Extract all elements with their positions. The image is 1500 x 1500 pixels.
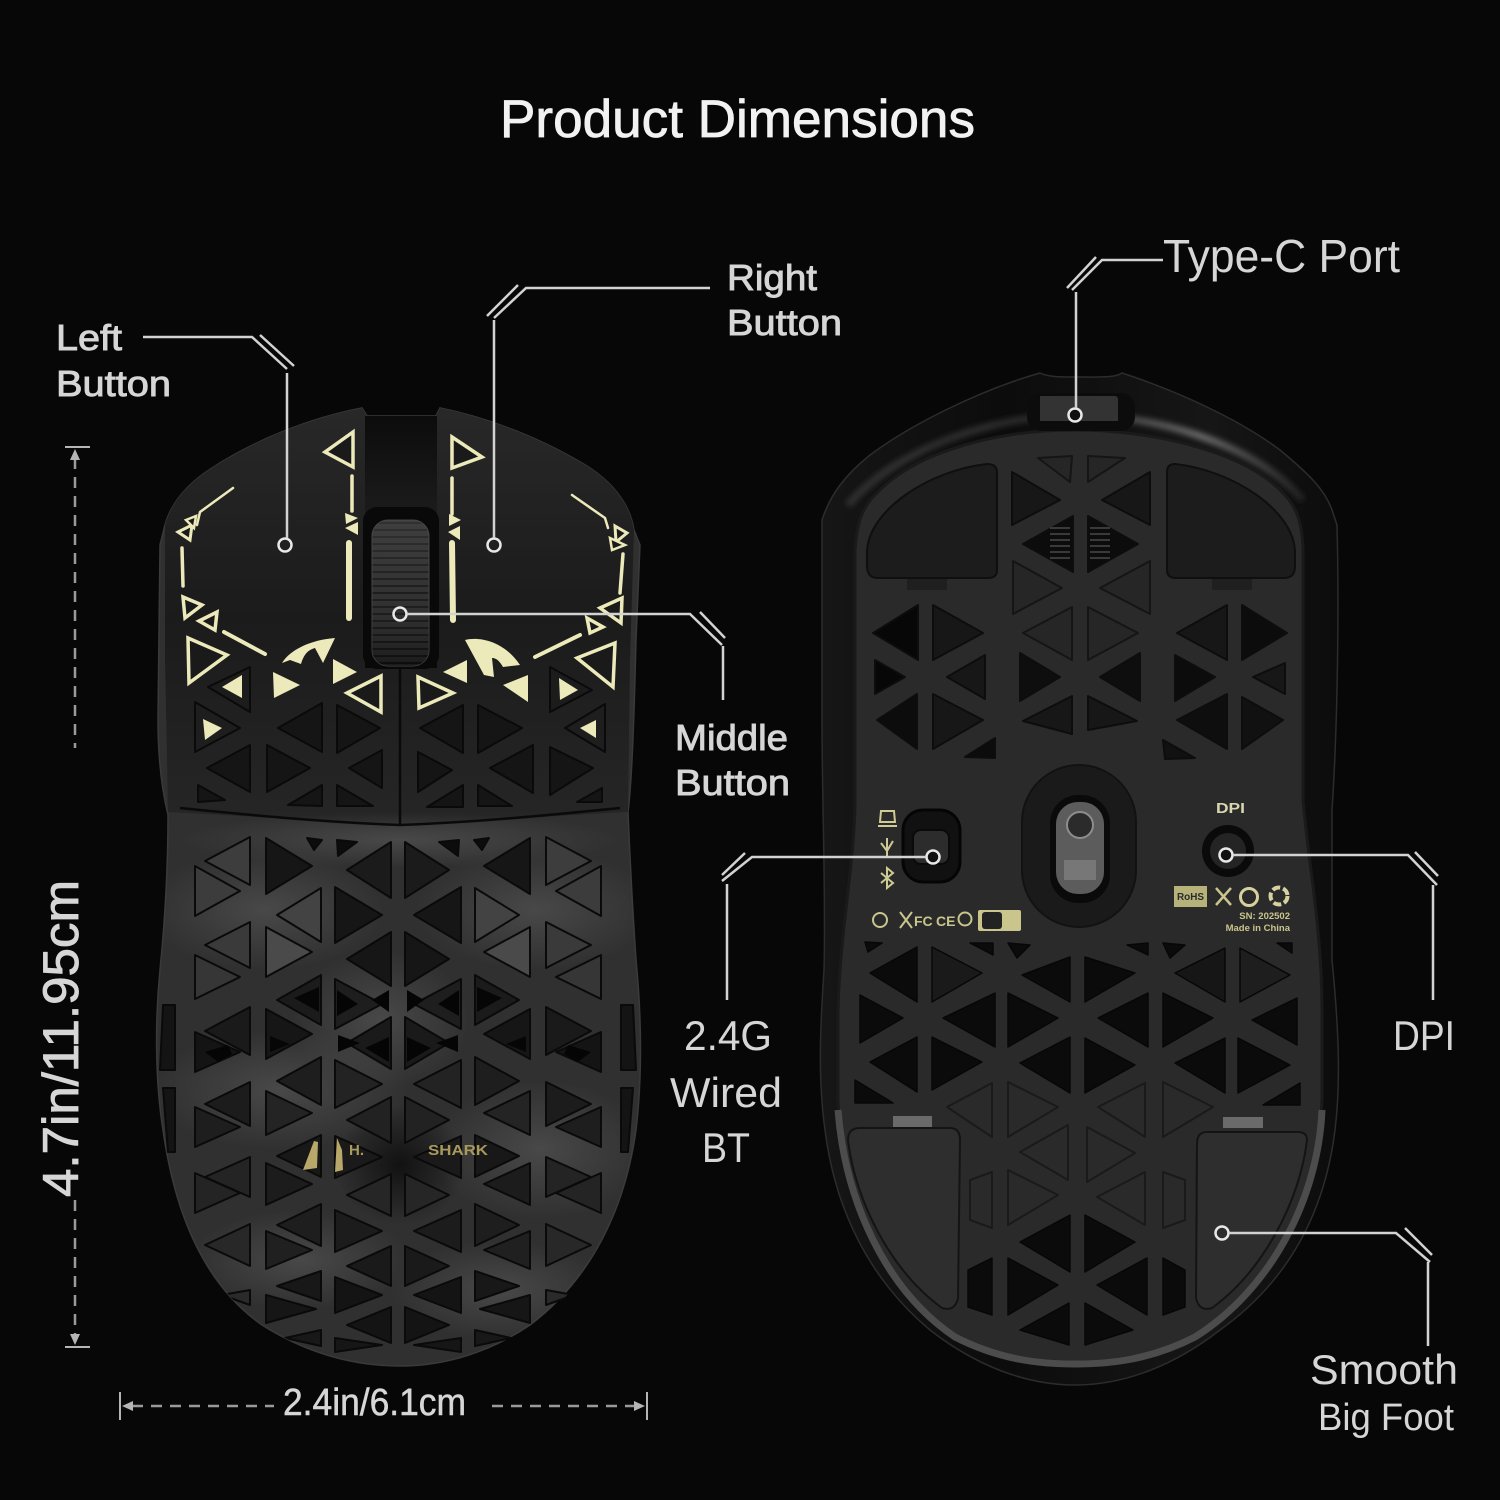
- height caps and arrows: [65, 447, 90, 1347]
- spring detail: [1050, 528, 1110, 558]
- certification badge icons: [873, 913, 887, 927]
- hotspot: middle button: [394, 608, 406, 620]
- origin: Made in China: [1226, 923, 1291, 934]
- plate lower rim highlight: [838, 1110, 1322, 1364]
- regulatory marks left: [873, 910, 1021, 931]
- mode icons: [878, 811, 897, 888]
- scroll wheel: [372, 520, 429, 666]
- logo remnants through lattice: [303, 1138, 364, 1172]
- switch well: [903, 810, 960, 882]
- gold accent lines: [182, 476, 623, 657]
- blank outlined triangles upper: [1013, 456, 1150, 660]
- scroll wheel sheen: [372, 520, 429, 666]
- front lattice holes: [195, 667, 605, 807]
- DPI label: DPI: [1216, 800, 1245, 817]
- label: left button: Left: [56, 317, 122, 358]
- skate tab right: [1223, 1117, 1263, 1128]
- hotspot: type-c: [1068, 408, 1082, 422]
- lens body: [1056, 802, 1104, 894]
- label: type-c port: Type-C Port: [1163, 230, 1400, 282]
- width dashed left: [132, 1405, 274, 1407]
- callout: big foot: [1229, 1228, 1432, 1346]
- fcc mark: FC: [914, 913, 933, 929]
- icon: bluetooth: [881, 868, 893, 888]
- label: big foot: Big Foot: [1318, 1397, 1454, 1439]
- top skate left: [867, 464, 997, 578]
- weee mark: [900, 912, 912, 928]
- height dashed line top: [74, 458, 76, 748]
- lattice sheen: [184, 820, 615, 1324]
- callout: type-c: [1067, 257, 1163, 408]
- serial number: SN: 202502: [1239, 911, 1290, 922]
- label: smooth: Smooth: [1310, 1346, 1458, 1393]
- type-c port interior: [1040, 396, 1118, 421]
- width caps: [120, 1392, 647, 1420]
- panel: mouse top view: [145, 408, 655, 1366]
- sensor ring: [1022, 765, 1136, 927]
- height value: 4.7in/11.95cm: [33, 880, 89, 1197]
- rear skate left: [848, 1128, 960, 1309]
- width arrowheads: [122, 1401, 645, 1411]
- label: middle button: Middle: [675, 717, 788, 758]
- hotspot: big foot: [1216, 1226, 1228, 1240]
- callout labels: [56, 230, 1458, 1439]
- logo wordmark: H.: [349, 1142, 364, 1159]
- switch slider: [913, 830, 949, 864]
- DPI button: [1202, 825, 1254, 877]
- DPI button cap: [1210, 833, 1246, 869]
- upper vent triangles: [873, 472, 1287, 759]
- callout: right button: [487, 285, 710, 538]
- gold filled triangles: [203, 513, 596, 740]
- ce mark: CE: [936, 913, 955, 929]
- dimension: width: [120, 1382, 647, 1424]
- blank outlined triangles lower: [947, 1082, 1213, 1228]
- width value: 2.4in/6.1cm: [283, 1382, 466, 1424]
- sensor window: [1050, 795, 1110, 903]
- bottom shell: [820, 373, 1338, 1385]
- weee bin: [1216, 888, 1231, 905]
- scroll wheel well: [365, 416, 437, 668]
- gold label: [978, 910, 1021, 931]
- gold outlined triangles: [178, 432, 627, 712]
- mode switch: [903, 810, 960, 882]
- lower vent triangles: [855, 942, 1300, 1345]
- title: Product Dimensions: [500, 90, 975, 149]
- label: middle button second line: Button: [675, 762, 790, 803]
- icon: usb: [881, 838, 893, 858]
- recycling mark: [1270, 888, 1288, 904]
- rear lattice holes: [160, 837, 391, 1352]
- panel: mouse bottom view: [820, 373, 1338, 1385]
- bottom plate: [838, 430, 1322, 1362]
- button seam: [180, 665, 620, 825]
- logo wordmark right: SHARK: [428, 1142, 488, 1159]
- label: dpi: DPI: [1393, 1012, 1455, 1059]
- label: 2.4g: 2.4G: [684, 1012, 772, 1059]
- sensor lens: [1056, 802, 1104, 894]
- gold label inner: [982, 912, 1002, 929]
- hotspot: switch: [926, 850, 940, 864]
- callout: dpi: [1233, 852, 1438, 1000]
- shell rim highlight: [848, 415, 1303, 505]
- label: right button second line: Button: [727, 302, 842, 343]
- side vent strip: [160, 1005, 175, 1152]
- rear skate right: [1196, 1132, 1307, 1309]
- label: right button: Right: [727, 257, 817, 298]
- height arrowheads: [70, 449, 80, 1345]
- label: left button second line: Button: [56, 363, 171, 404]
- logo glyph right bar: [335, 1138, 343, 1172]
- rohs text: RoHS: [1177, 892, 1204, 903]
- rear lattice holes mirrored: [405, 837, 636, 1352]
- hotspot: right button: [488, 538, 500, 552]
- type-c port: [1027, 393, 1135, 431]
- height dashed line bottom: [74, 1200, 76, 1336]
- callout: middle button: [407, 612, 725, 700]
- inner black shapes: [337, 990, 358, 1016]
- width dashed right: [492, 1405, 636, 1407]
- scroll wheel housing: [363, 507, 439, 669]
- circle mark: [958, 912, 972, 926]
- skate tabs top: [907, 579, 1252, 590]
- label: bt: BT: [702, 1124, 750, 1171]
- mouse body: [157, 408, 640, 1366]
- skate tab left: [893, 1116, 932, 1127]
- lens detail: [1067, 812, 1093, 838]
- callout: switch: [722, 853, 926, 1000]
- rohs mark: [1174, 886, 1207, 907]
- label: wired: Wired: [670, 1069, 782, 1116]
- icon: receiver: [878, 811, 897, 826]
- front buttons shell: [165, 408, 634, 825]
- dimension: height: [33, 447, 90, 1347]
- recycling circle: [1240, 888, 1258, 906]
- hotspot: dpi: [1220, 848, 1232, 862]
- callout: left button: [143, 335, 294, 538]
- regulatory marks right: [1174, 886, 1291, 934]
- lens base: [1064, 860, 1096, 880]
- callout lines: [143, 257, 1438, 1346]
- top skate right: [1167, 464, 1295, 578]
- hotspot: left button: [278, 538, 292, 552]
- logo glyph left bar: [303, 1141, 318, 1170]
